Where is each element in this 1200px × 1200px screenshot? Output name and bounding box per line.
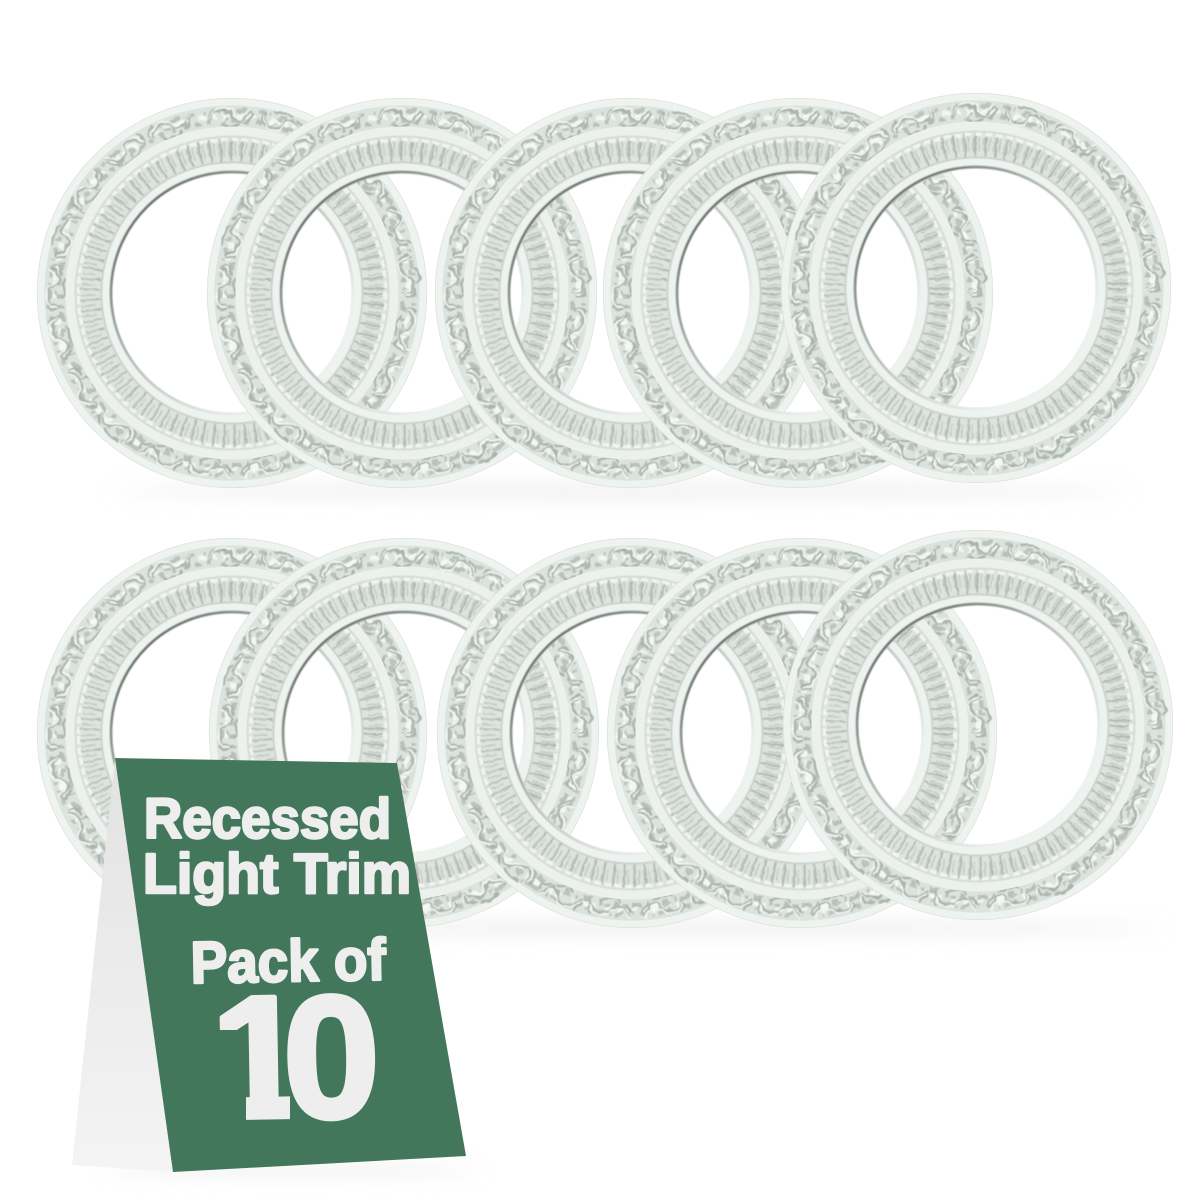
trim ring 5 [781, 93, 1171, 483]
top row of trim rings [37, 93, 1171, 488]
number: 10 [220, 993, 376, 1122]
heading: Recessed: Recessed [144, 787, 391, 851]
heading: Light Trim: Light Trim [143, 842, 411, 906]
ground shadow: bottom row [240, 923, 1160, 933]
ground shadow: top row [110, 486, 1130, 496]
trim ring 2 [207, 98, 597, 488]
card shadow [100, 1166, 480, 1174]
trim ring 9 [607, 538, 997, 928]
label: Pack of: Pack of [190, 927, 387, 996]
trim ring 7 [209, 538, 599, 928]
number: 10: 0 [281, 958, 381, 1155]
trim ring 3 [435, 98, 825, 488]
tent card [72, 758, 480, 1174]
trim ring 10 [783, 530, 1173, 920]
trim ring 1 [37, 98, 427, 488]
trim ring 6 [37, 538, 427, 928]
card front panel [115, 758, 466, 1172]
bottom row of trim rings [37, 530, 1173, 928]
card side flap [72, 758, 173, 1172]
trim ring 8 [437, 538, 827, 928]
number: 10: 1 [209, 958, 309, 1155]
trim ring 4 [603, 98, 993, 488]
